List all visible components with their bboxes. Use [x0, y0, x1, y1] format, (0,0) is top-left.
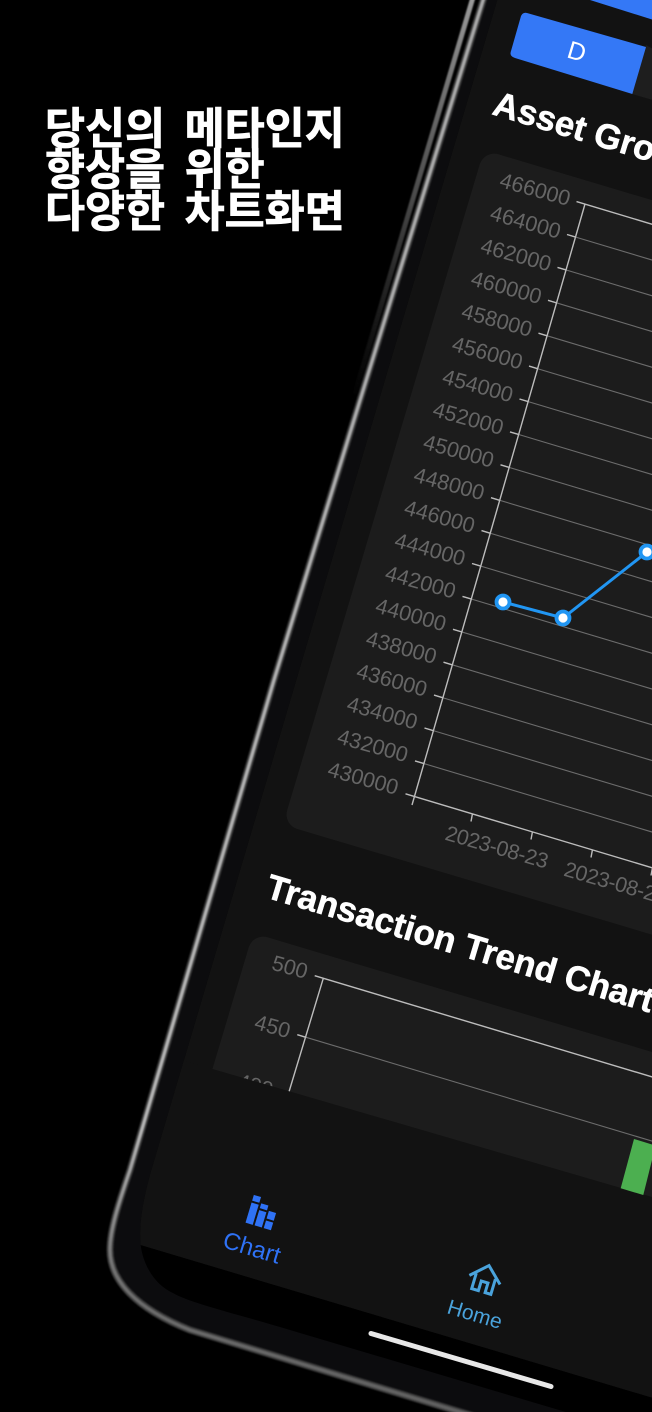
y axis labels: 440000 — [373, 593, 449, 636]
title — [45, 106, 345, 237]
y axis labels: 446000 — [402, 495, 478, 538]
bottom navigation — [171, 1069, 652, 1364]
data line — [494, 544, 652, 626]
y axis labels: 456000 — [449, 331, 525, 374]
y axis labels: 448000 — [411, 462, 487, 505]
y axis labels: 430000 — [325, 756, 401, 800]
home indicator — [371, 1334, 551, 1386]
title: 다양한 차트화면 — [45, 189, 345, 237]
icon: home — [468, 1264, 502, 1296]
x axis labels — [445, 826, 652, 901]
y axis labels: 460000 — [468, 266, 545, 309]
top tab — [590, 0, 652, 20]
y axis labels: 458000 — [459, 298, 535, 342]
y axis labels: 450000 — [421, 429, 497, 473]
axes — [288, 975, 652, 1092]
phone frame outer band — [353, 0, 474, 400]
y axis labels: 450 — [252, 1009, 293, 1043]
title: 향상을 위한 — [45, 147, 265, 195]
y axis labels: 452000 — [430, 397, 506, 440]
card background — [212, 937, 652, 1197]
y axis labels: 438000 — [363, 626, 440, 669]
heading: transaction trend: Transaction Trend Chart — [262, 867, 652, 1020]
period selector — [510, 13, 652, 102]
screen bottom black area — [140, 0, 652, 1412]
label: chart: Chart — [220, 1227, 284, 1270]
icon: chart — [246, 1195, 279, 1230]
y axis labels: 462000 — [478, 233, 554, 276]
nav background — [171, 1069, 652, 1364]
y axis labels: 400 — [235, 1068, 276, 1102]
active button D — [510, 13, 646, 94]
y axis labels: 454000 — [440, 364, 516, 407]
grid line — [297, 1034, 652, 1142]
y axis labels: 466000 — [497, 167, 573, 211]
y axis labels: 442000 — [383, 560, 459, 604]
phone frame highlight — [110, 0, 485, 1412]
y axis labels: 432000 — [335, 724, 411, 767]
inactive button — [632, 45, 652, 102]
panel: transaction trend chart — [212, 937, 652, 1197]
y axis labels: 500 — [269, 950, 311, 984]
label: home: Home — [445, 1296, 505, 1334]
y axis labels — [244, 956, 308, 1086]
green bar — [621, 1139, 652, 1195]
grid lines — [415, 234, 652, 881]
x axis labels: 2023-08-23 — [443, 821, 551, 874]
y axis labels: 436000 — [354, 658, 430, 702]
phone frame edge — [110, 0, 485, 1412]
panel: asset growth chart — [283, 150, 652, 1002]
button label: D — [564, 36, 589, 68]
y axis labels — [325, 167, 573, 800]
y axis labels: 464000 — [488, 200, 564, 244]
y axis labels: 444000 — [392, 527, 468, 571]
title: 당신의 메타인지 — [45, 106, 345, 154]
card background — [283, 150, 652, 1002]
axes and ticks — [406, 202, 652, 914]
screen background — [184, 0, 652, 1069]
y axis labels: 434000 — [344, 691, 420, 734]
